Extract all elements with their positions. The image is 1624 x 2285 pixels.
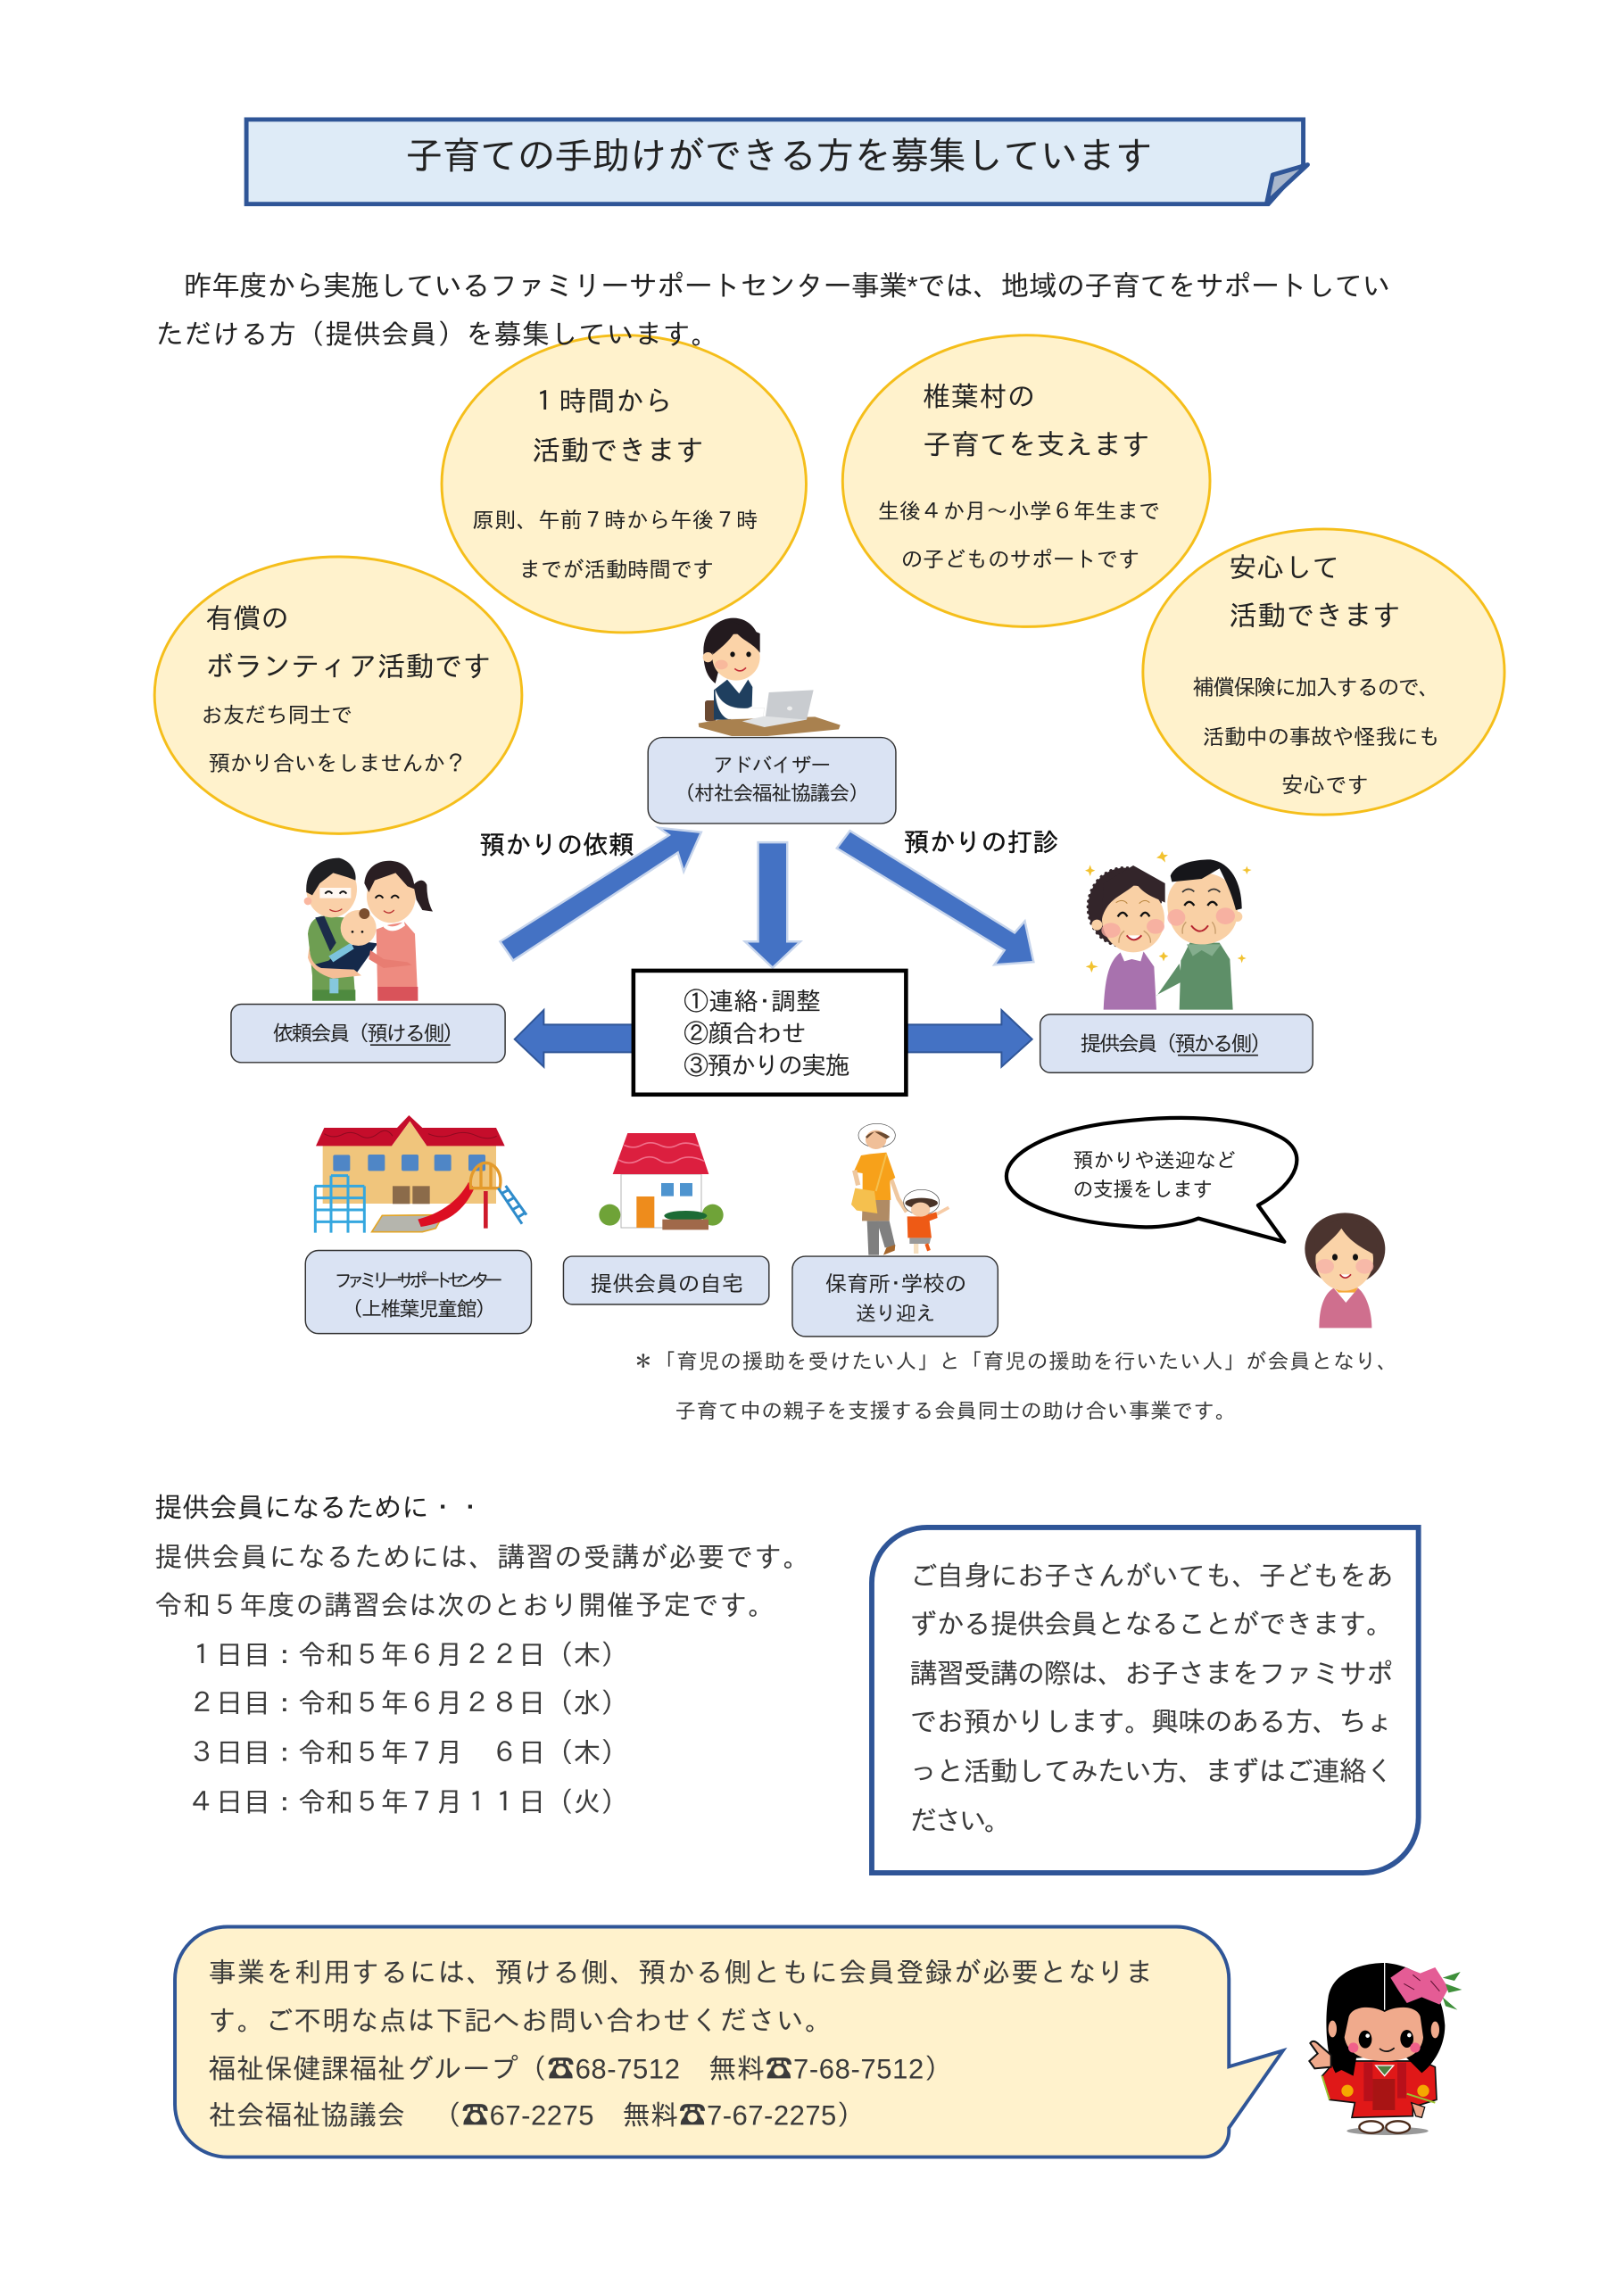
box: provider home — [563, 1256, 769, 1304]
label: request: 預かりの依頼 — [480, 832, 634, 860]
callout: parents welcome: でお預かりします。興味のある方、ちょ — [909, 1707, 1394, 1738]
arrow: steps to provider member — [906, 1010, 1032, 1067]
contact callout: 事業を利用するには、預ける側、預かる側ともに会員登録が必要となりま — [209, 1958, 1153, 1989]
box: steps — [634, 971, 906, 1095]
intro paragraph — [156, 270, 1391, 351]
course schedule text: １日目：令和５年６月２２日（木） — [188, 1639, 628, 1670]
bubble: peace of mind: 安心して — [1229, 552, 1339, 584]
illustration: mascot — [1309, 1963, 1462, 2135]
box: provider member — [1040, 1014, 1313, 1072]
callout: parents welcome — [872, 1527, 1419, 1873]
illustration: parent and child walking — [851, 1123, 949, 1255]
footnote: 子育て中の親子を支援する会員同士の助け合い事業です。 — [675, 1400, 1236, 1423]
section heading: 提供会員になるために・・ — [154, 1492, 484, 1523]
bubble: from one hour: 活動できます — [532, 435, 704, 467]
course schedule text: 提供会員になるためには、講習の受講が必要です。 — [154, 1542, 810, 1573]
bubble: paid volunteer: 預かり合いをしませんか？ — [209, 752, 467, 776]
contact callout: 社会福祉協議会 （☎67-2275 無料☎7-67-2275） — [209, 2100, 865, 2132]
bubble: paid volunteer — [154, 557, 522, 833]
speech bubble — [1007, 1118, 1297, 1242]
illustration: provider home — [599, 1133, 724, 1229]
box: provider home: 提供会員の自宅 — [591, 1272, 743, 1296]
box: center: （上椎葉児童館） — [343, 1297, 495, 1320]
course schedule text — [154, 1542, 810, 1817]
bubble: paid volunteer: ボランティア活動です — [205, 650, 492, 683]
arrow: adviser down to steps — [745, 842, 800, 968]
bubble: support Shiiba child care: 椎葉村の — [923, 382, 1035, 413]
course schedule text: ２日目：令和５年６月２８日（水） — [188, 1687, 628, 1718]
speech bubble: の支援をします — [1073, 1178, 1213, 1201]
bubble: from one hour: １時間から — [531, 386, 672, 418]
bubble: from one hour: 原則、午前７時から午後７時 — [472, 509, 758, 533]
bubble: support Shiiba child care: 子育てを支えます — [923, 429, 1150, 461]
arrow: adviser to provider — [837, 831, 1033, 965]
box: pickup — [792, 1256, 998, 1337]
arrow: steps to client member — [515, 1010, 634, 1067]
bubble: peace of mind: 補償保険に加入するので、 — [1192, 676, 1440, 700]
bubble: from one hour: までが活動時間です — [519, 559, 715, 583]
contact callout: す。ご不明な点は下記へお問い合わせください。 — [209, 2005, 833, 2036]
title banner — [246, 120, 1307, 204]
box: adviser: （村社会福祉協議会） — [675, 782, 869, 805]
box: adviser — [648, 738, 896, 824]
illustration: family support center building — [315, 1115, 526, 1233]
intro paragraph: 昨年度から実施しているファミリーサポートセンター事業*では、地域の子育てをサポートしてい — [184, 270, 1391, 302]
callout: parents welcome: ずかる提供会員となることができます。 — [909, 1609, 1394, 1640]
callout: parents welcome: ご自身にお子さんがいても、子どもをあ — [909, 1561, 1394, 1592]
course schedule text: ３日目：令和５年７月 ６日（木） — [188, 1737, 628, 1768]
box: provider member: 提供会員（預かる側） — [1081, 1033, 1272, 1056]
bubble: peace of mind — [1143, 529, 1504, 815]
label: offer: 預かりの打診 — [904, 829, 1058, 857]
contact callout: 福祉保健課福祉グループ（☎68-7512 無料☎7-68-7512） — [209, 2053, 952, 2084]
footnote — [633, 1351, 1398, 1423]
illustration: adviser at laptop — [699, 618, 841, 736]
bubble: peace of mind: 活動中の事故や怪我にも — [1203, 726, 1440, 750]
bubble: peace of mind: 活動できます — [1229, 600, 1401, 632]
bubble: from one hour — [442, 335, 806, 633]
callout: parents welcome: っと活動してみたい方、まずはご連絡く — [909, 1756, 1394, 1787]
box: steps: ③預かりの実施 — [684, 1052, 849, 1080]
callout: parents welcome: ださい。 — [909, 1806, 1012, 1837]
bubble: peace of mind: 安心です — [1281, 774, 1369, 799]
bubble: paid volunteer: 有償の — [205, 603, 288, 634]
illustration: elderly couple — [1085, 851, 1252, 1010]
footnote: ＊「育児の援助を受けたい人」と「育児の援助を行いたい人」が会員となり、 — [633, 1351, 1398, 1374]
title banner: 子育ての手助けができる方を募集しています — [405, 135, 1153, 177]
illustration: young family — [304, 858, 433, 1001]
box: steps: ②顔合わせ — [684, 1020, 806, 1047]
box: center: ファミリーサポートセンター — [334, 1271, 503, 1291]
box: steps: ①連絡･調整 — [684, 988, 821, 1015]
box: client member: 依頼会員（預ける側） — [273, 1022, 464, 1046]
speech bubble: 預かりや送迎など — [1073, 1148, 1236, 1171]
contact callout — [175, 1926, 1283, 2157]
arrow: client to adviser — [500, 828, 701, 960]
bubble: support Shiiba child care — [842, 335, 1210, 626]
bubble: support Shiiba child care: 生後４か月～小学６年生まで — [878, 501, 1160, 525]
intro paragraph: ただける方（提供会員）を募集しています。 — [156, 319, 718, 351]
box: center — [305, 1251, 532, 1334]
box: adviser: アドバイザー — [713, 754, 831, 777]
illustration: speaking woman — [1305, 1213, 1385, 1328]
box: pickup: 保育所･学校の — [825, 1272, 966, 1296]
box: client member — [231, 1004, 505, 1063]
course schedule text: ４日目：令和５年７月１１日（火） — [188, 1786, 628, 1817]
bubble: paid volunteer: お友だち同士で — [201, 704, 352, 728]
section: becoming a provider — [154, 1492, 810, 1817]
box: pickup: 送り迎え — [856, 1302, 936, 1325]
bubble: support Shiiba child care: の子どものサポートです — [901, 548, 1140, 572]
callout: parents welcome: 講習受講の際は、お子さまをファミサポ — [909, 1659, 1394, 1690]
course schedule text: 令和５年度の講習会は次のとおり開催予定です。 — [154, 1590, 775, 1621]
